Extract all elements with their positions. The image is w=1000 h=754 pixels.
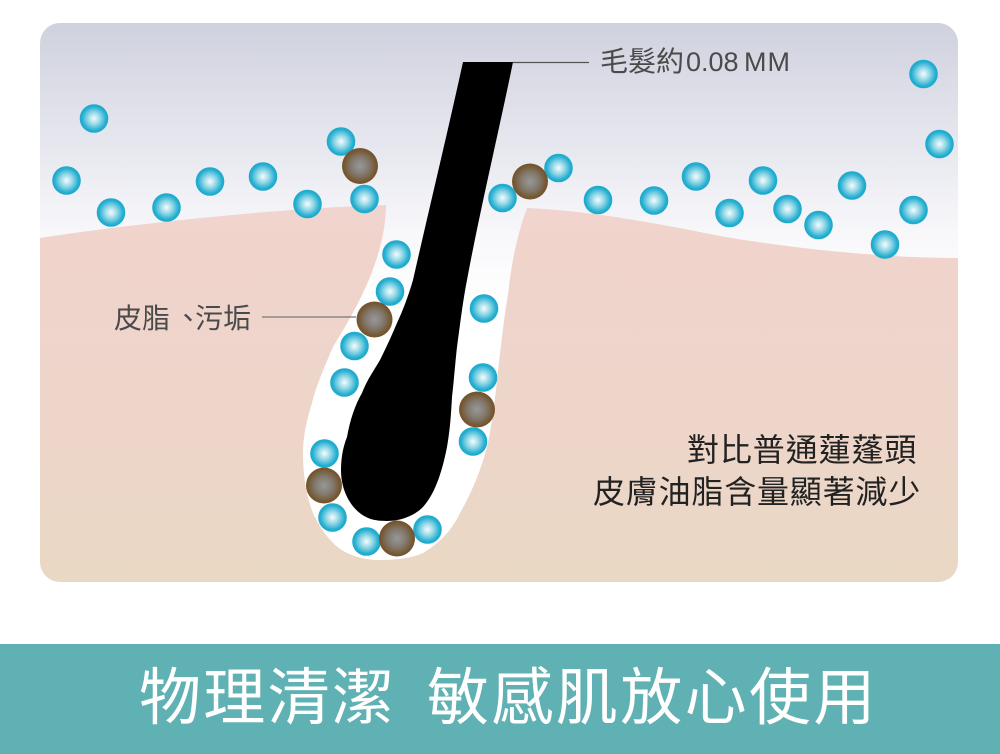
comparison text: 皮膚油脂含量顯著減少 [593, 474, 921, 510]
callout: sebum and dirt: 污垢 [195, 303, 251, 334]
dirt particles [306, 148, 548, 556]
callout: sebum and dirt: 、 [174, 303, 202, 334]
comparison text: 對比普通蓮蓬頭 [687, 432, 917, 468]
callout: sebum and dirt: 皮脂 [114, 303, 170, 334]
water droplets [52, 60, 954, 556]
callout: sebum and dirt [114, 303, 356, 334]
bottom banner: 敏感肌放心使用 [427, 664, 878, 733]
comparison text [593, 432, 921, 510]
sky background [40, 23, 958, 582]
bottom banner [0, 644, 1000, 754]
callout: hair thickness [513, 46, 791, 77]
panel: skin cross-section [40, 23, 958, 582]
bottom banner: 物理清潔 [139, 664, 396, 733]
hair shaft [341, 62, 513, 521]
callout: hair thickness: 毛髮約 [600, 46, 684, 77]
skin layer [40, 205, 958, 582]
callout: hair thickness: 0.08 [686, 47, 739, 77]
callout: hair thickness: MM [744, 47, 791, 77]
